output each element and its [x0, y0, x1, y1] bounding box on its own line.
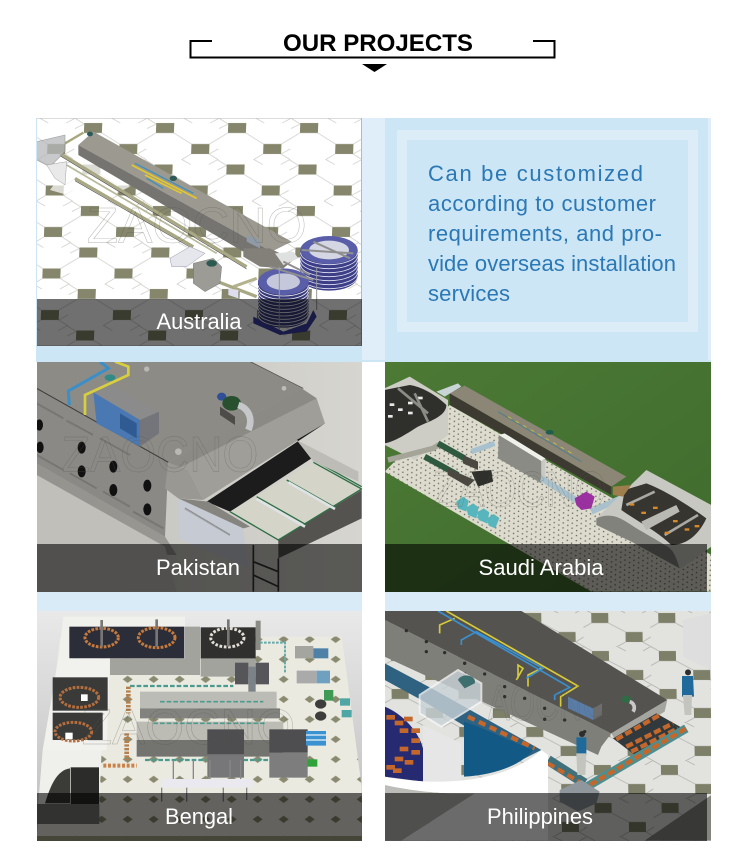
machine frame: [420, 670, 481, 727]
pale blue section background: [36, 118, 711, 611]
watermark: ZAOCNO: [87, 198, 307, 254]
caption bar: Saudi Arabia: [383, 544, 707, 592]
title block: OUR PROJECTS: [190, 30, 554, 72]
ovens: [140, 692, 277, 708]
image: factory plan view: [37, 617, 362, 841]
bottom left room: [38, 750, 102, 804]
purple machine: [575, 492, 595, 510]
note text: requirements, and pro-: [428, 221, 662, 246]
heading: OUR PROJECTS: [283, 30, 473, 57]
watermark: ZAOCNO: [62, 427, 258, 483]
image: oven and conveyor detail: [385, 611, 711, 841]
image: plant on green ground: [385, 377, 711, 592]
title bracket frame: [190, 41, 554, 58]
teal machines: [456, 497, 499, 528]
control box: [93, 383, 159, 420]
left room: [385, 377, 448, 460]
spiral: [385, 707, 423, 782]
pipes: [68, 362, 108, 405]
people: [682, 669, 694, 715]
right-hand machines: [260, 643, 285, 673]
caption bar: Australia: [37, 299, 362, 346]
spiral tower front: [253, 262, 317, 335]
oven: [385, 611, 667, 733]
wall box: [499, 433, 545, 461]
image: oven line with spiral towers: [37, 132, 358, 335]
caption: Pakistan: Pakistan: [156, 555, 240, 580]
caption bar: Pakistan: [37, 544, 362, 592]
caption: Philippines: Philippines: [487, 804, 593, 829]
panel: Australia: [36, 118, 362, 346]
oven: [450, 386, 626, 487]
orange tray: [613, 713, 683, 755]
hood: [168, 388, 325, 500]
side box: [178, 498, 245, 544]
packaging table: [162, 779, 253, 788]
panel: Philippines: [385, 611, 711, 841]
caption: Bengal: Bengal: [165, 804, 233, 829]
panel: customization note: [402, 135, 693, 327]
note frame: [402, 135, 693, 327]
caption bar: Philippines: [385, 793, 707, 841]
caption: Australia: Australia: [156, 309, 242, 334]
fan: [217, 393, 226, 401]
lines: [388, 443, 441, 460]
caption bar: Bengal: [37, 793, 362, 841]
conveyor tray: [278, 490, 362, 558]
note text: services: [428, 281, 510, 306]
pipes: [440, 611, 578, 707]
watermark: ZAOCNO: [82, 699, 295, 755]
panel: Bengal: [37, 611, 362, 841]
panel: Pakistan: [36, 362, 362, 592]
top left rooms: [58, 617, 185, 658]
note text: [428, 161, 676, 306]
caption: Saudi Arabia: Saudi Arabia: [478, 555, 604, 580]
left conveyor: [385, 663, 541, 760]
right room: [596, 470, 711, 568]
dark machine blocks: [235, 663, 248, 684]
note text: according to customer: [428, 191, 656, 216]
note text: Can be customized: [428, 161, 643, 186]
watermark: ZAOCNO: [433, 462, 606, 518]
note text: vide overseas installation: [428, 251, 676, 276]
watermark: AOCNO: [488, 675, 608, 731]
image: tunnel oven close-up: [36, 362, 362, 592]
spiral tower rear: [300, 236, 358, 291]
panel: Saudi Arabia: [383, 362, 711, 592]
left rooms: [43, 658, 110, 750]
curved wall: [423, 725, 461, 782]
icon: down arrow: [362, 64, 387, 72]
